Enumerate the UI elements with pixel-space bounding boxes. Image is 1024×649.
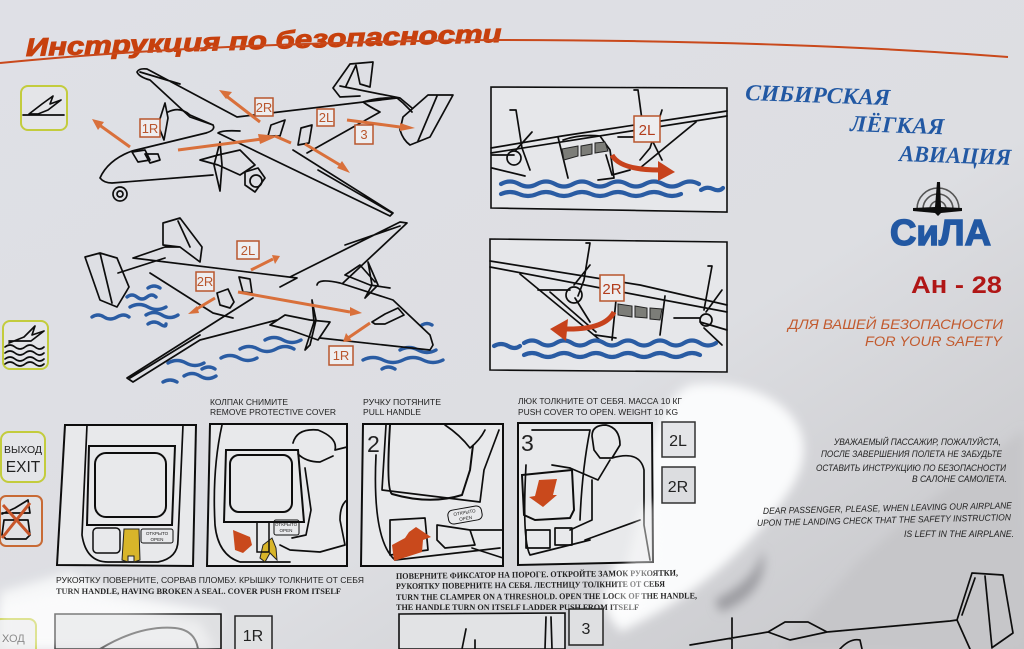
engines and wheels <box>158 103 265 192</box>
airline name <box>745 80 1013 170</box>
plane outline <box>100 62 453 216</box>
diagram: plane on water: 1R <box>333 348 349 363</box>
step 1 caption top: REMOVE PROTECTIVE COVER <box>210 407 336 417</box>
step 1 caption top <box>210 397 336 417</box>
icon: exit sign: EXIT <box>6 459 41 476</box>
passenger note: УВАЖАЕМЫЙ ПАССАЖИР, ПОЖАЛУЙСТА, <box>833 436 1001 447</box>
step 3 frame: pull handle: 2 <box>367 431 380 457</box>
caption: turn handle: РУКОЯТКУ ПОВЕРНИТЕ, СОРВАВ ПЛОМБУ. КРЫШКУ ТОЛКНИТЕ ОТ СЕБЯ <box>56 575 364 585</box>
exit arrows <box>188 255 370 342</box>
door tag: 1R <box>235 616 272 649</box>
door tag: 2R: 2R <box>668 479 688 496</box>
door tag: 2L <box>639 122 655 139</box>
window <box>224 450 304 522</box>
open label <box>274 520 299 535</box>
open label: ОТКРЫТО <box>275 522 298 527</box>
person <box>280 430 347 552</box>
airline name: СИБИРСКАЯ <box>745 80 892 110</box>
caption: turn handle <box>56 575 364 596</box>
open label: ОТКРЫТО <box>146 531 169 536</box>
passenger note: ОСТАВИТЬ ИНСТРУКЦИЮ ПО БЕЗОПАСНОСТИ <box>816 463 1007 473</box>
open label <box>447 505 483 525</box>
title underline <box>0 40 1008 63</box>
caption: clamper and ladder: TURN THE CLAMPER ON A THRESHOLD. OPEN THE LOCK OF THE HANDLE, <box>396 590 697 602</box>
open label <box>141 529 173 543</box>
door tag: 1R: 1R <box>243 628 263 645</box>
caption: clamper and ladder: THE HANDLE TURN ON ITSELF LADDER PUSH FROM ITSELF <box>396 602 639 612</box>
diagram: plane on land: 2L <box>319 110 333 125</box>
left propeller <box>492 110 532 176</box>
seal and handle <box>233 530 252 553</box>
hand <box>437 525 503 558</box>
cockpit windows <box>618 304 662 320</box>
water waves <box>92 286 443 382</box>
right propeller <box>674 266 727 345</box>
step 4 frame: push cover: 3 <box>521 430 534 456</box>
diagram: plane on land: 2R <box>256 100 272 115</box>
left propeller <box>538 243 590 322</box>
caption: clamper and ladder: ПОВЕРНИТЕ ФИКСАТОР НА ПОРОГЕ. ОТКРОЙТЕ ЗАМОК РУКОЯТКИ, <box>396 568 678 581</box>
water waves <box>494 340 716 357</box>
icon: exit sign cropped: ХОД <box>2 633 25 645</box>
door tag: 3: 3 <box>582 621 591 638</box>
door tag: 2L: 2L <box>669 433 687 450</box>
title: Инструкция по безопасности <box>25 20 502 62</box>
icon: water landing <box>3 321 48 369</box>
airline name: АВИАЦИЯ <box>897 141 1013 170</box>
exit arrow <box>550 312 614 341</box>
panel: door 2L water exit <box>491 87 727 212</box>
right propeller <box>618 90 696 168</box>
icon: prohibited <box>0 496 42 546</box>
exit arrow <box>612 155 675 181</box>
handle plate <box>390 518 428 555</box>
safety slogan: ДЛЯ ВАШЕЙ БЕЗОПАСНОСТИ <box>786 315 1004 332</box>
diagram: plane on water: 2R <box>197 274 213 289</box>
passenger note: IS LEFT IN THE AIRPLANE. <box>904 529 1014 539</box>
step 2 caption top: РУЧКУ ПОТЯНИТЕ <box>363 397 441 407</box>
door windows <box>132 120 312 163</box>
step 3 caption top <box>518 396 682 417</box>
safety slogan: FOR YOUR SAFETY <box>865 333 1004 349</box>
bottom panel: door 3 <box>399 613 565 649</box>
door tag <box>600 275 624 301</box>
step 2 caption top: PULL HANDLE <box>363 407 421 417</box>
caption: turn handle: TURN HANDLE, HAVING BROKEN A SEAL. COVER PUSH FROM ITSELF <box>56 586 341 596</box>
step 1 frame: turn handle <box>57 425 196 566</box>
icon: exit sign <box>1 432 45 482</box>
door tag <box>634 116 660 142</box>
step 3 frame: pull handle <box>361 424 503 566</box>
water waves <box>501 182 723 196</box>
passenger note: ПОСЛЕ ЗАВЕРШЕНИЯ ПОЛЕТА НЕ ЗАБУДЬТЕ <box>821 449 1003 459</box>
open label: OPEN <box>279 528 293 533</box>
window <box>87 446 175 525</box>
diagram: plane on water <box>85 218 443 382</box>
logo: СиЛА <box>890 182 991 253</box>
passenger note: UPON THE LANDING CHECK THAT THE SAFETY INSTRUCTION <box>757 512 1011 528</box>
door tags <box>140 119 160 137</box>
door tags: 2L <box>241 243 255 258</box>
diagram: plane on land <box>92 62 453 216</box>
icon: land landing <box>21 86 67 130</box>
door windows <box>217 277 404 324</box>
step 1 caption top: КОЛПАК СНИМИТЕ <box>210 397 288 407</box>
diagram: plane on land: 3 <box>360 127 368 142</box>
door tags <box>237 241 259 259</box>
wing and fuselage <box>490 261 727 340</box>
orange arrow <box>392 527 431 561</box>
engines and propellers <box>270 262 390 350</box>
icon: exit sign: ВЫХОД <box>4 444 42 456</box>
bottom panel: door 1R <box>55 614 221 649</box>
step 2 frame: remove cover <box>207 424 347 566</box>
step 3 caption top: PUSH COVER TO OPEN. WEIGHT 10 KG <box>518 407 678 417</box>
person <box>570 425 650 560</box>
door tag: 2R <box>602 281 622 298</box>
airline name: ЛЁГКАЯ <box>849 111 946 139</box>
door tags: 1R <box>142 121 158 136</box>
passenger note: В САЛОНЕ САМОЛЕТА. <box>912 474 1007 484</box>
caption: clamper and ladder <box>396 568 697 612</box>
passenger note <box>757 436 1014 539</box>
open label: ОТКРЫТО <box>453 508 476 517</box>
caption: clamper and ladder: РУКОЯТКУ ПОВЕРНИТЕ НА СЕБЯ. ЛЕСТНИЦУ ТОЛКНИТЕ ОТ СЕБЯ <box>396 579 666 591</box>
window <box>388 425 473 500</box>
icon: exit sign cropped <box>0 619 36 649</box>
step 4 frame: push cover <box>518 423 653 565</box>
cover plate <box>93 528 120 553</box>
door tag: 3 <box>569 609 603 645</box>
wing and fuselage <box>491 111 727 180</box>
panel: door 2R water exit <box>490 239 727 372</box>
step 2 caption top <box>363 397 441 417</box>
safety slogan <box>786 315 1004 349</box>
cockpit windows <box>562 142 608 160</box>
aircraft type: Ан - 28 <box>911 272 1002 299</box>
logo: СиЛА: СиЛА <box>890 212 991 253</box>
open label: OPEN <box>459 515 472 522</box>
step 3 caption top: ЛЮК ТОЛКНИТЕ ОТ СЕБЯ. МАССА 10 КГ <box>518 396 682 406</box>
plane outline <box>85 218 433 382</box>
passenger note: DEAR PASSENGER, PLEASE, WHEN LEAVING OUR AIRPLANE <box>763 500 1013 516</box>
hatch <box>522 470 574 520</box>
exit arrows <box>92 90 415 173</box>
yellow handle <box>122 529 140 562</box>
orange arrow <box>529 479 557 507</box>
plane side view cropped <box>690 573 1013 649</box>
open label: OPEN <box>150 537 164 542</box>
